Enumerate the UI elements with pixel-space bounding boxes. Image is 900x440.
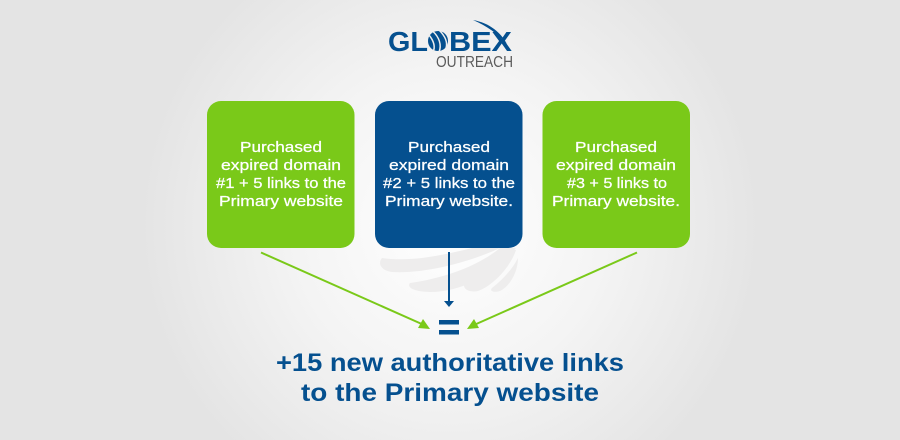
logo globe bbox=[428, 30, 448, 52]
panel: domain 3 bbox=[542, 101, 690, 248]
logo wordmark start: GL bbox=[388, 26, 428, 57]
text: domain 3: Primary website. bbox=[552, 193, 680, 210]
panel: domain 1 bbox=[207, 101, 354, 248]
text: domain 3: Purchased bbox=[575, 139, 657, 156]
equals sign bbox=[439, 320, 459, 334]
logo subtitle: OUTREACH bbox=[436, 54, 513, 71]
watermark: globe swooshes bbox=[380, 248, 518, 292]
text: domain 3: expired domain bbox=[556, 157, 676, 174]
panel: domain 2 bbox=[375, 101, 522, 248]
logo bbox=[388, 20, 513, 71]
arrow: left green bbox=[261, 252, 430, 329]
result heading: to the Primary website bbox=[301, 379, 599, 407]
text: domain 1: Primary website bbox=[219, 193, 343, 210]
result heading: +15 new authoritative links bbox=[276, 349, 624, 377]
logo arc bbox=[473, 20, 507, 44]
arrow: center blue bbox=[444, 252, 454, 307]
logo wordmark end: BEX bbox=[449, 26, 513, 57]
text: domain 1: #1 + 5 links to the bbox=[216, 175, 346, 192]
text: domain 2: Purchased bbox=[408, 139, 490, 156]
text: domain 3: #3 + 5 links to bbox=[567, 175, 667, 192]
text: domain 2: expired domain bbox=[389, 157, 509, 174]
text: domain 2: #2 + 5 links to the bbox=[383, 175, 515, 192]
text: domain 1: expired domain bbox=[221, 157, 341, 174]
text: domain 2: Primary website. bbox=[385, 193, 513, 210]
arrow: right green bbox=[467, 252, 637, 329]
text: domain 1: Purchased bbox=[240, 139, 322, 156]
